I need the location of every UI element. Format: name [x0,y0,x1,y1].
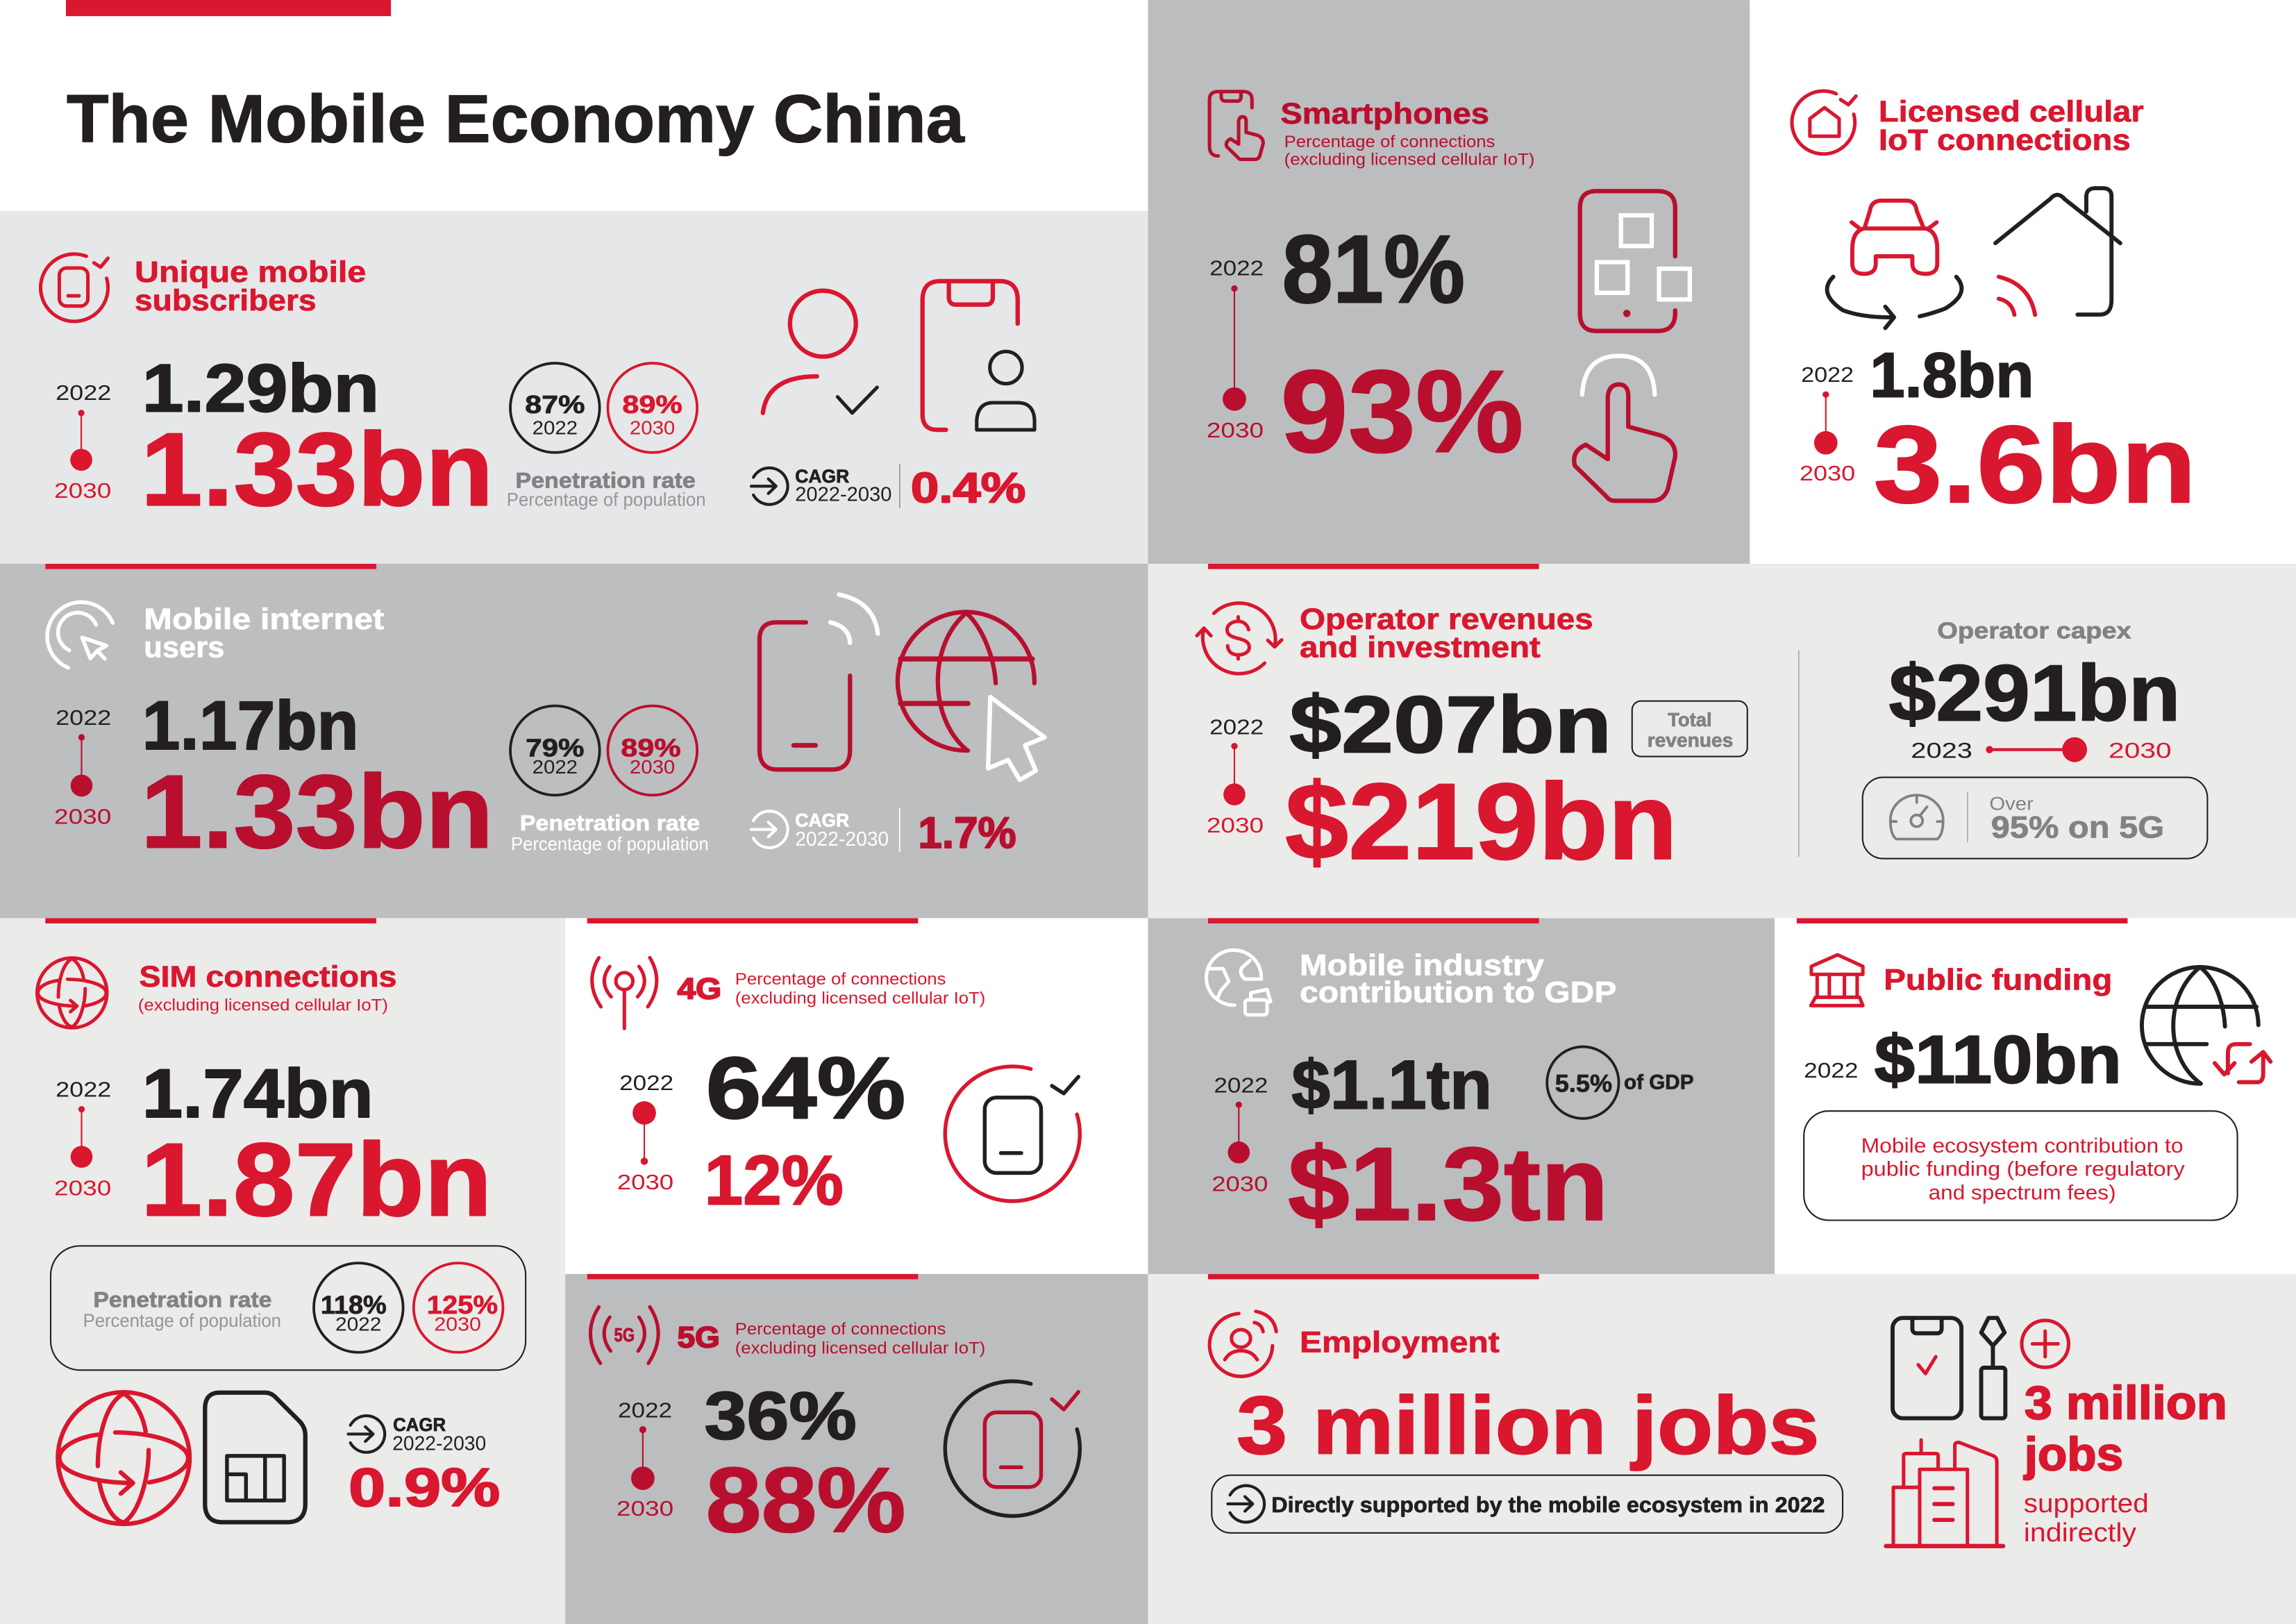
heading: Operator revenues [1300,603,1593,635]
icon: home in ring [1792,91,1856,154]
penetration box: 125% [427,1291,498,1319]
icon: tapping hand [1574,356,1675,501]
cagr: 0.9% [349,1457,500,1518]
cagr: 1.7% [918,809,1016,857]
penetration box: 2022 [335,1314,381,1335]
icon: signal cursor [47,602,112,668]
timeline: 2022 [56,1078,111,1102]
cagr [751,464,1025,511]
figure 2022: 1.74bn [142,1055,374,1132]
caption: (excluding licensed cellular IoT) [735,989,985,1007]
penetration box: Percentage of population [83,1310,281,1331]
panel: unique mobile subscribers [0,211,1148,564]
penetration circles: 89% [621,734,681,762]
figure 2030: 93% [1280,346,1523,477]
subheading: (excluding licensed cellular IoT) [138,996,388,1014]
heading: SIM connections [139,960,397,993]
5g share box: Over [1989,793,2034,814]
caption: Percentage of connections [735,1320,946,1339]
heading: Employment [1300,1325,1500,1358]
panel: licensed cellular iot [1750,0,2296,564]
timeline [617,1071,673,1194]
heading: IoT connections [1879,124,2131,156]
panel: public funding [1775,918,2296,1274]
icon: 5g signal: 5G [614,1324,635,1346]
operator capex: Operator capex [1937,618,2131,644]
panel: title [0,0,1148,211]
cagr: 2022-2030 [795,483,891,505]
figure 2022: $207bn [1289,679,1611,769]
figure 2030: 12% [704,1141,844,1220]
capex timeline [1911,737,2172,762]
heading: contribution to GDP [1300,976,1616,1008]
5g share box [1863,778,2207,859]
penetration circles [510,363,697,453]
penetration box: 2030 [434,1314,481,1335]
timeline 2022 to 2030 [54,381,111,503]
heading: Public funding [1884,964,2112,996]
direct jobs caption [1212,1475,1843,1533]
operator capex [1863,618,2207,859]
penetration circles: 2022 [533,756,578,778]
figure indirect jobs [2023,1377,2227,1481]
icon: small globe [37,958,107,1028]
figure 2022: 1.8bn [1870,341,2034,411]
icon: phone in ring [945,1066,1080,1201]
figure 2022: 36% [704,1378,857,1454]
icon: person [763,291,877,413]
heading: Percentage of connections [1284,133,1495,151]
icon: antenna [592,957,657,1028]
timeline [54,1078,111,1200]
heading: and investment [1300,631,1541,664]
icon: phone in ring [945,1381,1080,1516]
icon: phone and tool [1893,1318,2005,1418]
penetration box: Penetration rate [93,1287,271,1312]
icon: buildings [1886,1440,2003,1546]
panel: mobile internet users [0,564,1148,918]
timeline: 2022 [619,1071,673,1095]
share of gdp: of GDP [1624,1071,1694,1094]
icon: connected house [1995,188,2120,315]
figure 2022: $1.1tn [1291,1047,1492,1124]
icon: dollar cycle [1197,603,1282,673]
heading: Unique mobile [135,256,366,288]
total revenues tag: Total [1668,709,1712,730]
heading: subscribers [135,284,317,317]
timeline: 2030 [1207,814,1264,837]
panel: employment [1148,1274,2296,1624]
penetration circles: 89% [622,391,682,419]
penetration circles: 2030 [630,417,675,438]
description box [1804,1111,2238,1221]
icon: phone with signal [760,594,878,769]
cagr: 2022-2030 [795,828,889,851]
figure 2030: 1.87bn [140,1121,492,1238]
timeline [1207,716,1264,837]
heading: Licensed cellular [1879,95,2144,128]
caption [735,1320,985,1357]
icon: phone with apps [1580,191,1690,331]
heading [1280,97,1534,169]
title: The Mobile Economy China [67,81,965,157]
icon: phone and hand [1209,92,1263,159]
cagr: 0.4% [911,464,1025,511]
total revenues tag: revenues [1648,730,1733,751]
figure 2022: 1.17bn [142,687,359,764]
label 5g: 5G [678,1321,720,1353]
caption: Percentage of connections [735,970,946,989]
penetration circles: 79% [526,734,585,762]
figure indirect jobs: 3 million [2025,1377,2227,1429]
cagr [751,808,1016,857]
penetration circles: 87% [525,391,585,419]
panel: sim connections [0,918,565,1624]
capex figure: $291bn [1889,650,2180,738]
icon: car [1827,201,1961,328]
figure 2030: $1.3tn [1288,1125,1609,1242]
cagr: CAGR [795,810,849,831]
timeline: 2022 [1209,716,1264,739]
figure direct jobs: 3 million jobs [1237,1380,1820,1471]
timeline: 2030 [617,1171,673,1194]
description box: Mobile ecosystem contribution to [1861,1135,2184,1157]
5g share box: 95% on 5G [1991,810,2164,844]
caption [735,970,985,1007]
icon: phone with user [923,281,1034,430]
figure 2030: 1.33bn [140,411,494,528]
cagr: 2022-2030 [392,1433,486,1455]
figure 2030: 88% [706,1449,905,1552]
penetration circles: 2030 [630,756,675,778]
icon: sim card [205,1393,305,1522]
penetration label [511,810,709,854]
timeline: 2022 [618,1399,672,1423]
capex timeline: 2030 [2109,737,2172,762]
capex timeline: 2023 [1911,737,1972,762]
timeline: 2022 [1209,257,1264,281]
icon: person in ring [1209,1312,1276,1376]
share of gdp [1547,1047,1694,1119]
heading: users [144,631,224,664]
heading [1300,603,1593,664]
heading: (excluding licensed cellular IoT) [1284,151,1534,169]
icon: large globe [58,1392,190,1524]
caption [2024,1489,2149,1548]
timeline: 2022 [56,706,111,730]
timeline: 2030 [1800,462,1855,485]
description box: public funding (before regulatory [1861,1158,2185,1181]
figure: $110bn [1875,1022,2122,1098]
heading [1879,95,2144,156]
timeline 2022 to 2030: 2030 [54,479,111,503]
label 4g: 4G [678,972,721,1005]
icon: 5g signal [590,1307,658,1364]
timeline: 2022 [1214,1073,1268,1097]
timeline: 2030 [54,1177,111,1200]
heading: Mobile internet [144,603,384,635]
timeline [617,1399,673,1521]
figure 2030: 1.33bn [140,753,494,870]
cagr [349,1414,500,1518]
icon: gauge [1891,795,1943,839]
caption: indirectly [2024,1518,2136,1548]
panel: 4g [565,918,1148,1274]
penetration label: Percentage of population [507,489,706,510]
cagr: CAGR [393,1414,446,1435]
timeline: 2030 [54,805,111,828]
direct jobs caption: Directly supported by the mobile ecosystem in 2022 [1271,1492,1825,1517]
heading: Mobile industry [1300,949,1545,982]
icon: bank [1811,955,1863,1005]
panel: gdp contribution [1148,918,1775,1274]
timeline [1207,257,1264,442]
penetration circles: 2022 [533,417,578,438]
penetration label: Penetration rate [520,810,700,835]
heading [135,256,366,317]
icon: phone in ring [40,254,108,321]
panel: 5g [565,1274,1148,1624]
caption: (excluding licensed cellular IoT) [735,1339,985,1357]
figure 2022: 1.29bn [142,351,379,426]
figure indirect jobs: jobs [2023,1429,2123,1481]
icon: plus [2022,1321,2068,1367]
figure 2022: 64% [706,1039,905,1137]
panel: smartphones [1148,0,1750,564]
timeline: 2030 [1207,419,1264,442]
share of gdp: 5.5% [1555,1071,1612,1097]
heading [1300,949,1616,1008]
icon: globe with arrows [2142,967,2270,1084]
year: 2022 [1804,1059,1858,1082]
penetration label [507,467,706,510]
description box: and spectrum fees) [1929,1181,2116,1204]
heading: Smartphones [1280,97,1489,130]
cagr: CAGR [795,466,849,487]
penetration label: Percentage of population [511,833,709,854]
icon: globe and cards [1206,950,1271,1015]
timeline [54,706,111,828]
penetration box [51,1246,526,1370]
timeline: 2030 [1212,1172,1268,1196]
total revenues tag [1632,701,1748,757]
penetration box: 118% [321,1291,387,1319]
panel: operator revenues and investment [1148,564,2296,918]
figure 2030: $219bn [1285,762,1677,882]
timeline [1212,1073,1268,1196]
figure 2022: 81% [1282,216,1465,324]
icon: globe and cursor [898,612,1045,780]
caption: supported [2024,1489,2149,1518]
timeline 2022 to 2030: 2022 [56,381,111,405]
penetration circles [510,706,697,795]
heading [144,603,384,664]
timeline: 2022 [1801,363,1854,387]
figure 2030: 3.6bn [1874,403,2197,526]
penetration label: Penetration rate [515,467,696,492]
timeline: 2030 [617,1497,673,1521]
timeline [1800,363,1855,485]
